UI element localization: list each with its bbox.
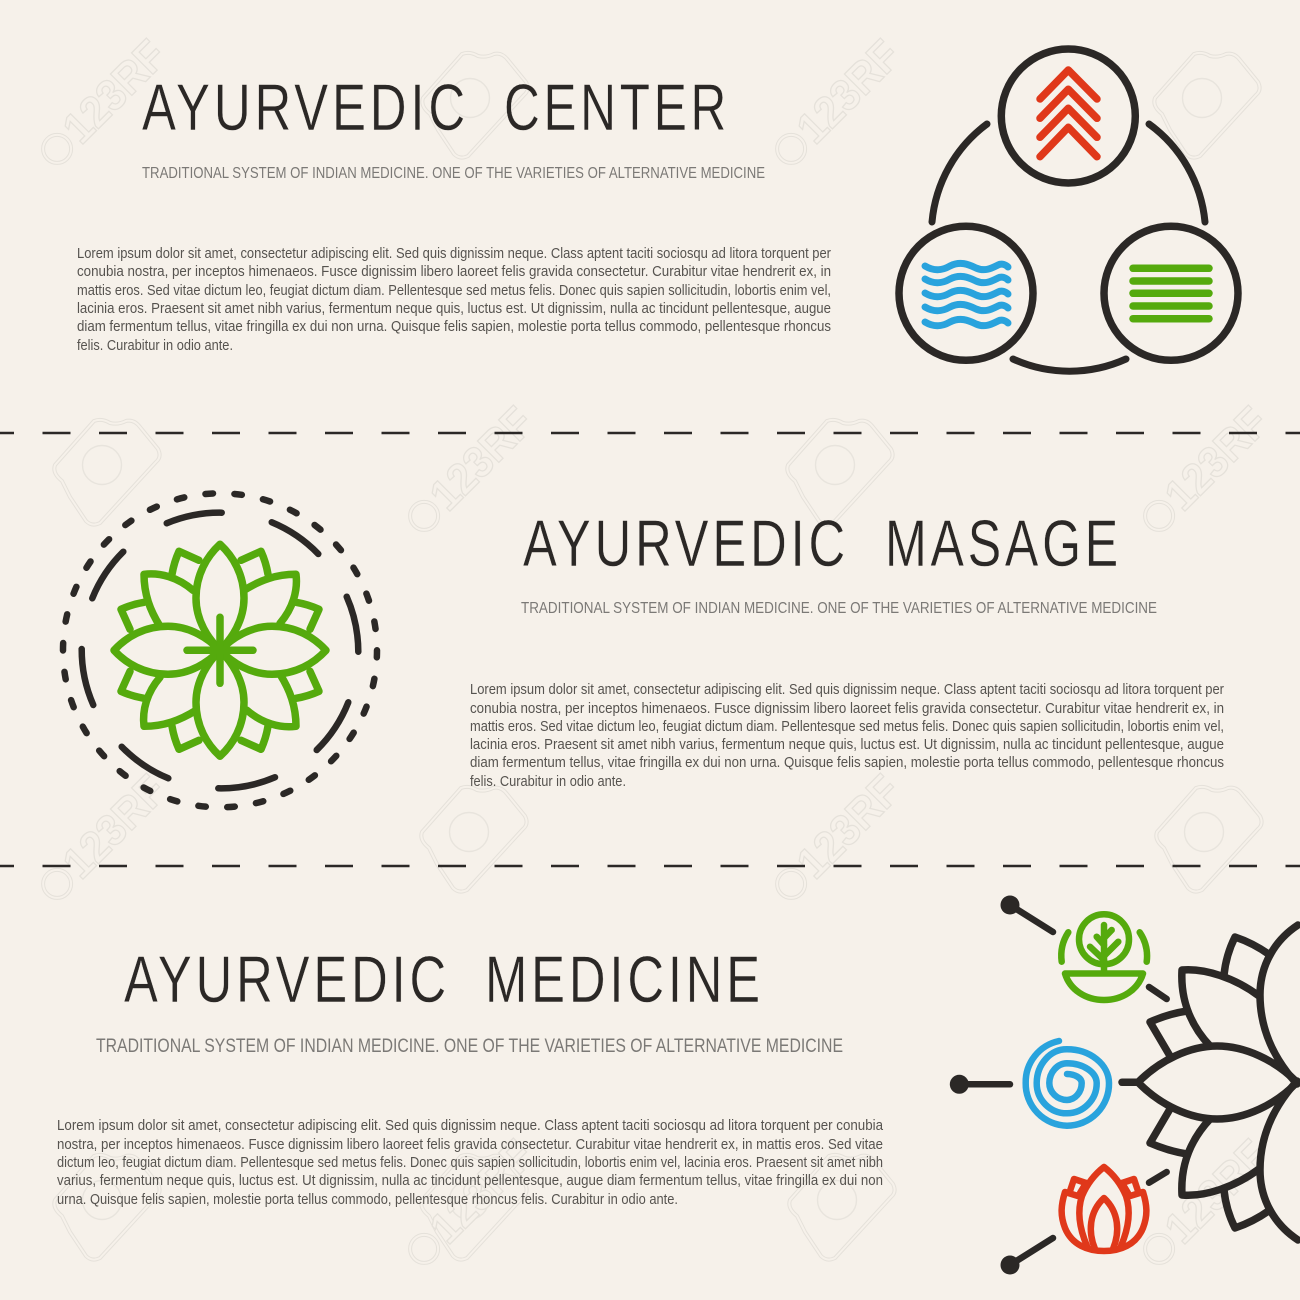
icon: water waves [899, 226, 1033, 360]
body text: masage [470, 682, 1224, 790]
half lotus [1122, 925, 1298, 1240]
subtitle: medicine: TRADITIONAL SYSTEM OF INDIAN MEDICINE. ONE OF THE VARIETIES OF ALTERNATIVE MEDICINE [96, 1036, 843, 1057]
body text: medicine: nostra, per inceptos himenaeos. Fusce dignissim libero laoreet felis gravida consectetur. Curabitur vitae hendrerit ex, in mattis eros. Sed vitae [57, 1137, 883, 1153]
body text: center: diam fermentum tellus, vitae fringilla ex dui non urna. Quisque felis sapien, molestie porta tellus commodo, pellentesque rhoncus [77, 319, 831, 335]
pin: middle [950, 1075, 1010, 1094]
title: ayurvedic masage: AYURVEDIC [523, 506, 849, 580]
title: ayurvedic masage: MASAGE [885, 506, 1122, 580]
body text: center: conubia nostra, per inceptos himenaeos. Fusce dignissim libero laoreet felis gravida consectetur. Curabitur vitae hendrerit ex, in [77, 264, 831, 280]
body text: center: lacinia eros. Praesent sit amet nibh varius, fermentum neque quis, luctus est. Ut dignissim, nulla ac tincidunt pellentesque, augue [77, 301, 831, 317]
subtitle: masage: TRADITIONAL SYSTEM OF INDIAN MEDICINE. ONE OF THE VARIETIES OF ALTERNATIVE MEDICINE [521, 600, 1157, 617]
subtitle: center: TRADITIONAL SYSTEM OF INDIAN MEDICINE. ONE OF THE VARIETIES OF ALTERNATIVE MEDICINE [142, 165, 765, 182]
title: ayurvedic medicine: AYURVEDIC [124, 942, 450, 1016]
pin: top [1000, 896, 1053, 932]
panel: ayurvedic medicine [57, 942, 884, 1208]
icon: fire chevrons [1001, 49, 1135, 183]
body text: medicine: varius, fermentum neque quis, luctus est. Ut dignissim, nulla ac tincidunt pellentesque, augue diam fermentum tellus, vitae fringilla ex dui non [57, 1173, 883, 1189]
body text: medicine [57, 1118, 884, 1208]
title: ayurvedic medicine [124, 942, 764, 1016]
icon: earth lines [1104, 226, 1238, 360]
flower [114, 544, 326, 756]
inner arcs [82, 513, 358, 788]
body text: medicine: Lorem ipsum dolor sit amet, consectetur adipiscing elit. Sed quis dignissim neque. Class aptent taciti sociosqu ad litora torquent per conubia [57, 1118, 884, 1134]
body text: masage: conubia nostra, per inceptos himenaeos. Fusce dignissim libero laoreet felis gravida consectetur. Curabitur vitae hendrerit ex, in [470, 701, 1224, 717]
body text: medicine: urna. Quisque felis sapien, molestie porta tellus commodo, pellentesque rhoncus felis. Curabitur in odio ante. [57, 1192, 678, 1208]
body text: masage: Lorem ipsum dolor sit amet, consectetur adipiscing elit. Sed quis dignissim neque. Class aptent taciti sociosqu ad litora torquent per [470, 682, 1224, 698]
pin: bottom [1000, 1238, 1053, 1274]
icon: blue spiral [1026, 1041, 1109, 1126]
title: ayurvedic center: AYURVEDIC [142, 70, 469, 144]
body text: masage: felis. Curabitur in odio ante. [470, 774, 626, 790]
icon: three elements cycle [899, 49, 1238, 371]
body text: center: mattis eros. Sed vitae dictum leo, feugiat dictum diam. Pellentesque sed metus felis. Donec quis sapien sollicitudin, lobortis enim vel, [77, 283, 831, 299]
icon: green flower in dashed circle [63, 493, 377, 807]
title: ayurvedic center: CENTER [504, 70, 730, 144]
connecting arcs [932, 124, 1205, 371]
panel: ayurvedic center [77, 70, 831, 354]
panel: ayurvedic massage [470, 506, 1224, 790]
body text: masage: diam fermentum tellus, vitae fringilla ex dui non urna. Quisque felis sapien, molestie porta tellus commodo, pellentesque rhoncus [470, 755, 1224, 771]
icon: green plant in bowl [1061, 914, 1147, 1000]
body text: medicine: dictum leo, feugiat dictum diam. Pellentesque sed metus felis. Donec quis sapien sollicitudin, lobortis enim vel, lacinia eros. Praesent sit amet nibh [57, 1155, 883, 1171]
title: ayurvedic medicine: MEDICINE [485, 942, 764, 1016]
icon: half lotus with elements [950, 896, 1298, 1274]
dashed ring [63, 493, 377, 807]
icon: red lotus [1062, 1167, 1146, 1251]
body text: masage: lacinia eros. Praesent sit amet nibh varius, fermentum neque quis, luctus est. Ut dignissim, nulla ac tincidunt pellentesque, augue [470, 737, 1224, 753]
body text: masage: mattis eros. Sed vitae dictum leo, feugiat dictum diam. Pellentesque sed metus felis. Donec quis sapien sollicitudin, lobortis enim vel, [470, 719, 1224, 735]
body text: center: felis. Curabitur in odio ante. [77, 338, 233, 354]
body text: center: Lorem ipsum dolor sit amet, consectetur adipiscing elit. Sed quis dignissim neque. Class aptent taciti sociosqu ad litora torquent per [77, 246, 831, 262]
body text: center [77, 246, 831, 354]
